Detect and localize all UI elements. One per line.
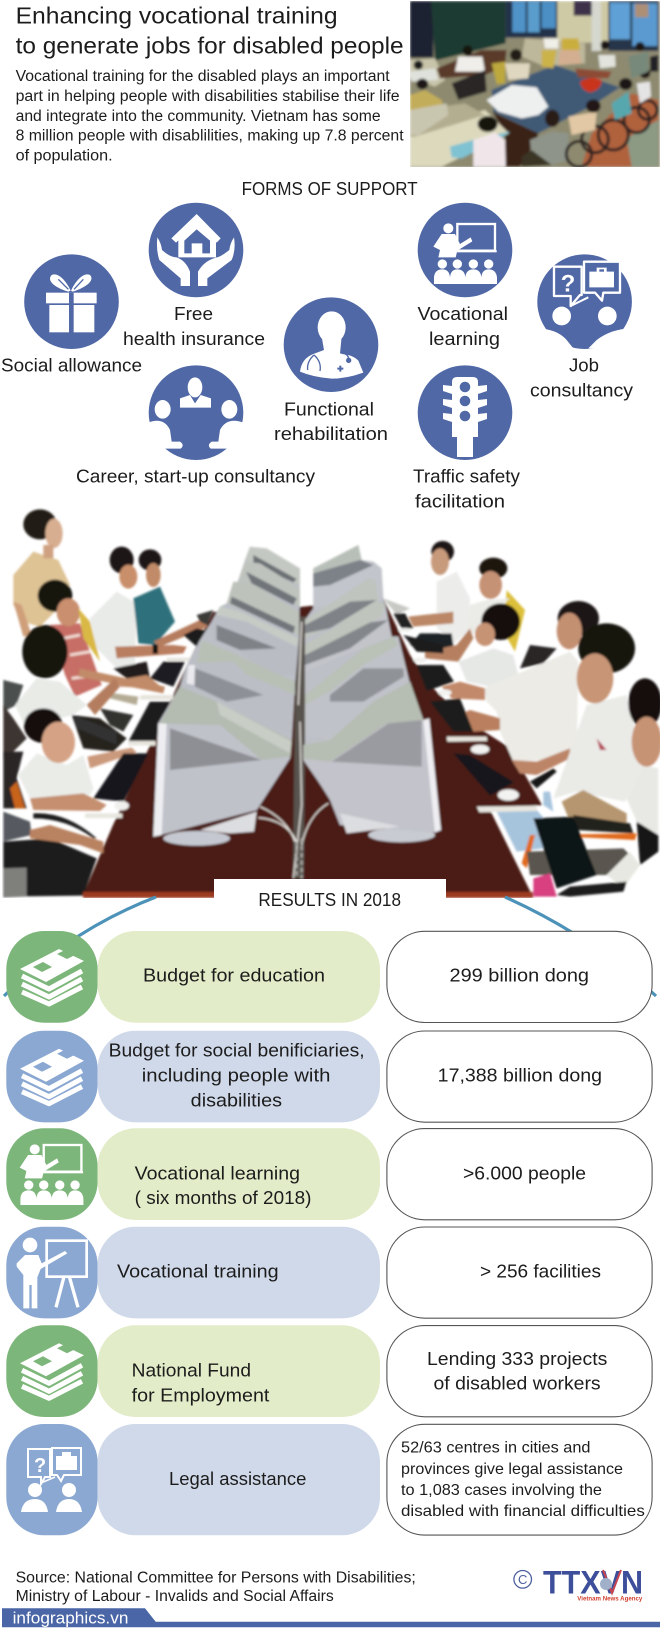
icon: gift, social allowance <box>24 254 119 349</box>
icon: trainer at flip chart <box>6 1227 98 1318</box>
label: traffic safety facilitation <box>413 467 520 511</box>
value pill: provinces give legal assistance <box>401 1461 623 1478</box>
photo: computer class <box>3 509 660 898</box>
row: budget for education <box>6 931 652 1023</box>
label pill <box>98 1325 380 1417</box>
label pill: Legal assistance <box>169 1469 306 1489</box>
icon: meeting table, career consultancy <box>147 365 245 460</box>
row: budget for social beneficiaries <box>6 1031 652 1122</box>
icon: teacher and class, vocational learning <box>418 203 512 297</box>
value pill: disabled with financial difficulties <box>401 1503 645 1520</box>
logo: TTXVN: C <box>518 1572 527 1587</box>
label: job consultancy: consultancy <box>530 381 633 401</box>
icon: money stack <box>6 1031 98 1122</box>
intro paragraph: Vocational training for the disabled plays an important <box>16 68 390 85</box>
value pill: Lending 333 projects <box>427 1349 607 1369</box>
label pill <box>98 1128 380 1220</box>
label pill: for Employment <box>132 1386 269 1406</box>
icon: two people with speech bubbles <box>6 1424 98 1535</box>
value pill: to 1,083 cases involving the <box>401 1482 602 1499</box>
row: legal assistance <box>6 1424 652 1535</box>
label pill <box>98 931 380 1023</box>
intro paragraph <box>16 68 404 165</box>
icon: money stack <box>6 931 98 1023</box>
logo: TTXVN: Vietnam News Agency <box>577 1596 642 1603</box>
logo: TTXVN: TTXVN <box>543 1564 643 1600</box>
value pill: >6.000 people <box>463 1163 586 1183</box>
intro paragraph: part in helping people with disabilities stabilise their life <box>16 88 400 105</box>
icon: house in hands, free health insurance <box>149 203 243 297</box>
label pill: National Fund <box>132 1361 251 1381</box>
label pill: including people with <box>142 1066 330 1086</box>
right monitors <box>303 545 441 842</box>
photo: sewing workshop <box>410 1 660 168</box>
title: to generate jobs for disabled people <box>16 32 404 58</box>
label pill: Budget for education <box>143 966 325 986</box>
decorative arc <box>4 897 656 996</box>
footer bar: infographics.vn <box>13 1608 128 1627</box>
label: free health insurance: Free <box>174 304 213 324</box>
intro paragraph: 8 million people with disablilities, making up 7.8 percent <box>16 128 404 145</box>
label: functional rehabilitation <box>274 399 388 444</box>
left students <box>3 509 213 898</box>
icon: traffic light, traffic safety facilitation <box>418 365 512 460</box>
label: free health insurance <box>123 304 265 349</box>
heading: results in 2018: RESULTS IN 2018 <box>258 890 401 910</box>
value pill: 299 billion dong <box>450 966 589 986</box>
central cables <box>258 617 328 878</box>
label: functional rehabilitation: rehabilitation <box>274 424 388 444</box>
table <box>83 598 542 897</box>
right students <box>383 541 660 897</box>
label pill: ( six months of 2018) <box>135 1188 312 1208</box>
label pill: Vocational learning <box>135 1163 300 1183</box>
label: social allowance: Social allowance <box>1 356 142 376</box>
source note: Ministry of Labour - Invalids and Social Affairs <box>16 1588 334 1605</box>
value pill <box>387 1031 652 1122</box>
label pill: Vocational training <box>117 1261 279 1281</box>
label: traffic safety facilitation: Traffic safety <box>413 467 520 487</box>
value pill: > 256 facilities <box>480 1261 601 1281</box>
label: free health insurance: health insurance <box>123 329 265 349</box>
icon: two people with speech bubbles: ? <box>34 1455 46 1477</box>
intro paragraph: and integrate into the community. Vietnam has some <box>16 108 381 125</box>
table front edge <box>83 892 533 898</box>
value pill <box>387 1129 652 1220</box>
title <box>16 2 404 58</box>
label: job consultancy: Job <box>569 356 599 376</box>
value pill: 52/63 centres in cities and <box>401 1440 590 1457</box>
label: career, start-up consultancy: Career, start-up consultancy <box>76 467 315 487</box>
label pill <box>98 1424 380 1535</box>
value pill <box>387 1424 652 1535</box>
value pill: 17,388 billion dong <box>438 1066 602 1086</box>
heading: results in 2018 <box>214 879 446 911</box>
label pill: Budget for social benificiaries, <box>109 1041 365 1061</box>
label pill: disabilities <box>191 1091 282 1111</box>
icon: money stack <box>6 1325 98 1417</box>
label: vocational learning: learning <box>429 329 500 349</box>
source note: Source: National Committee for Persons with Disabilities; <box>16 1570 416 1587</box>
intro paragraph: of population. <box>16 148 113 165</box>
value pill <box>387 931 652 1022</box>
value pill: of disabled workers <box>434 1373 601 1393</box>
heading: forms of support: FORMS OF SUPPORT <box>242 179 418 199</box>
icon: speech bubbles, job consultancy: ? <box>561 271 575 298</box>
row: vocational training <box>6 1227 652 1318</box>
value pill <box>387 1227 652 1318</box>
footer bar <box>2 1608 660 1627</box>
icon: speech bubbles, job consultancy <box>535 254 633 349</box>
label pill <box>98 1227 380 1318</box>
icon: doctor, functional rehabilitation <box>284 297 378 392</box>
label: vocational learning <box>418 304 508 349</box>
icon: teacher and class <box>6 1128 98 1220</box>
label pill <box>98 1031 380 1122</box>
value pill <box>387 1326 652 1417</box>
row: national fund for employment <box>6 1325 652 1417</box>
label: traffic safety facilitation: facilitation <box>415 491 505 511</box>
label: functional rehabilitation: Functional <box>284 399 374 419</box>
label: job consultancy <box>530 356 633 401</box>
label: vocational learning: Vocational <box>418 304 508 324</box>
left monitors <box>153 547 300 846</box>
row: vocational learning <box>6 1128 652 1220</box>
source note <box>16 1570 416 1605</box>
title: Enhancing vocational training <box>16 2 338 28</box>
